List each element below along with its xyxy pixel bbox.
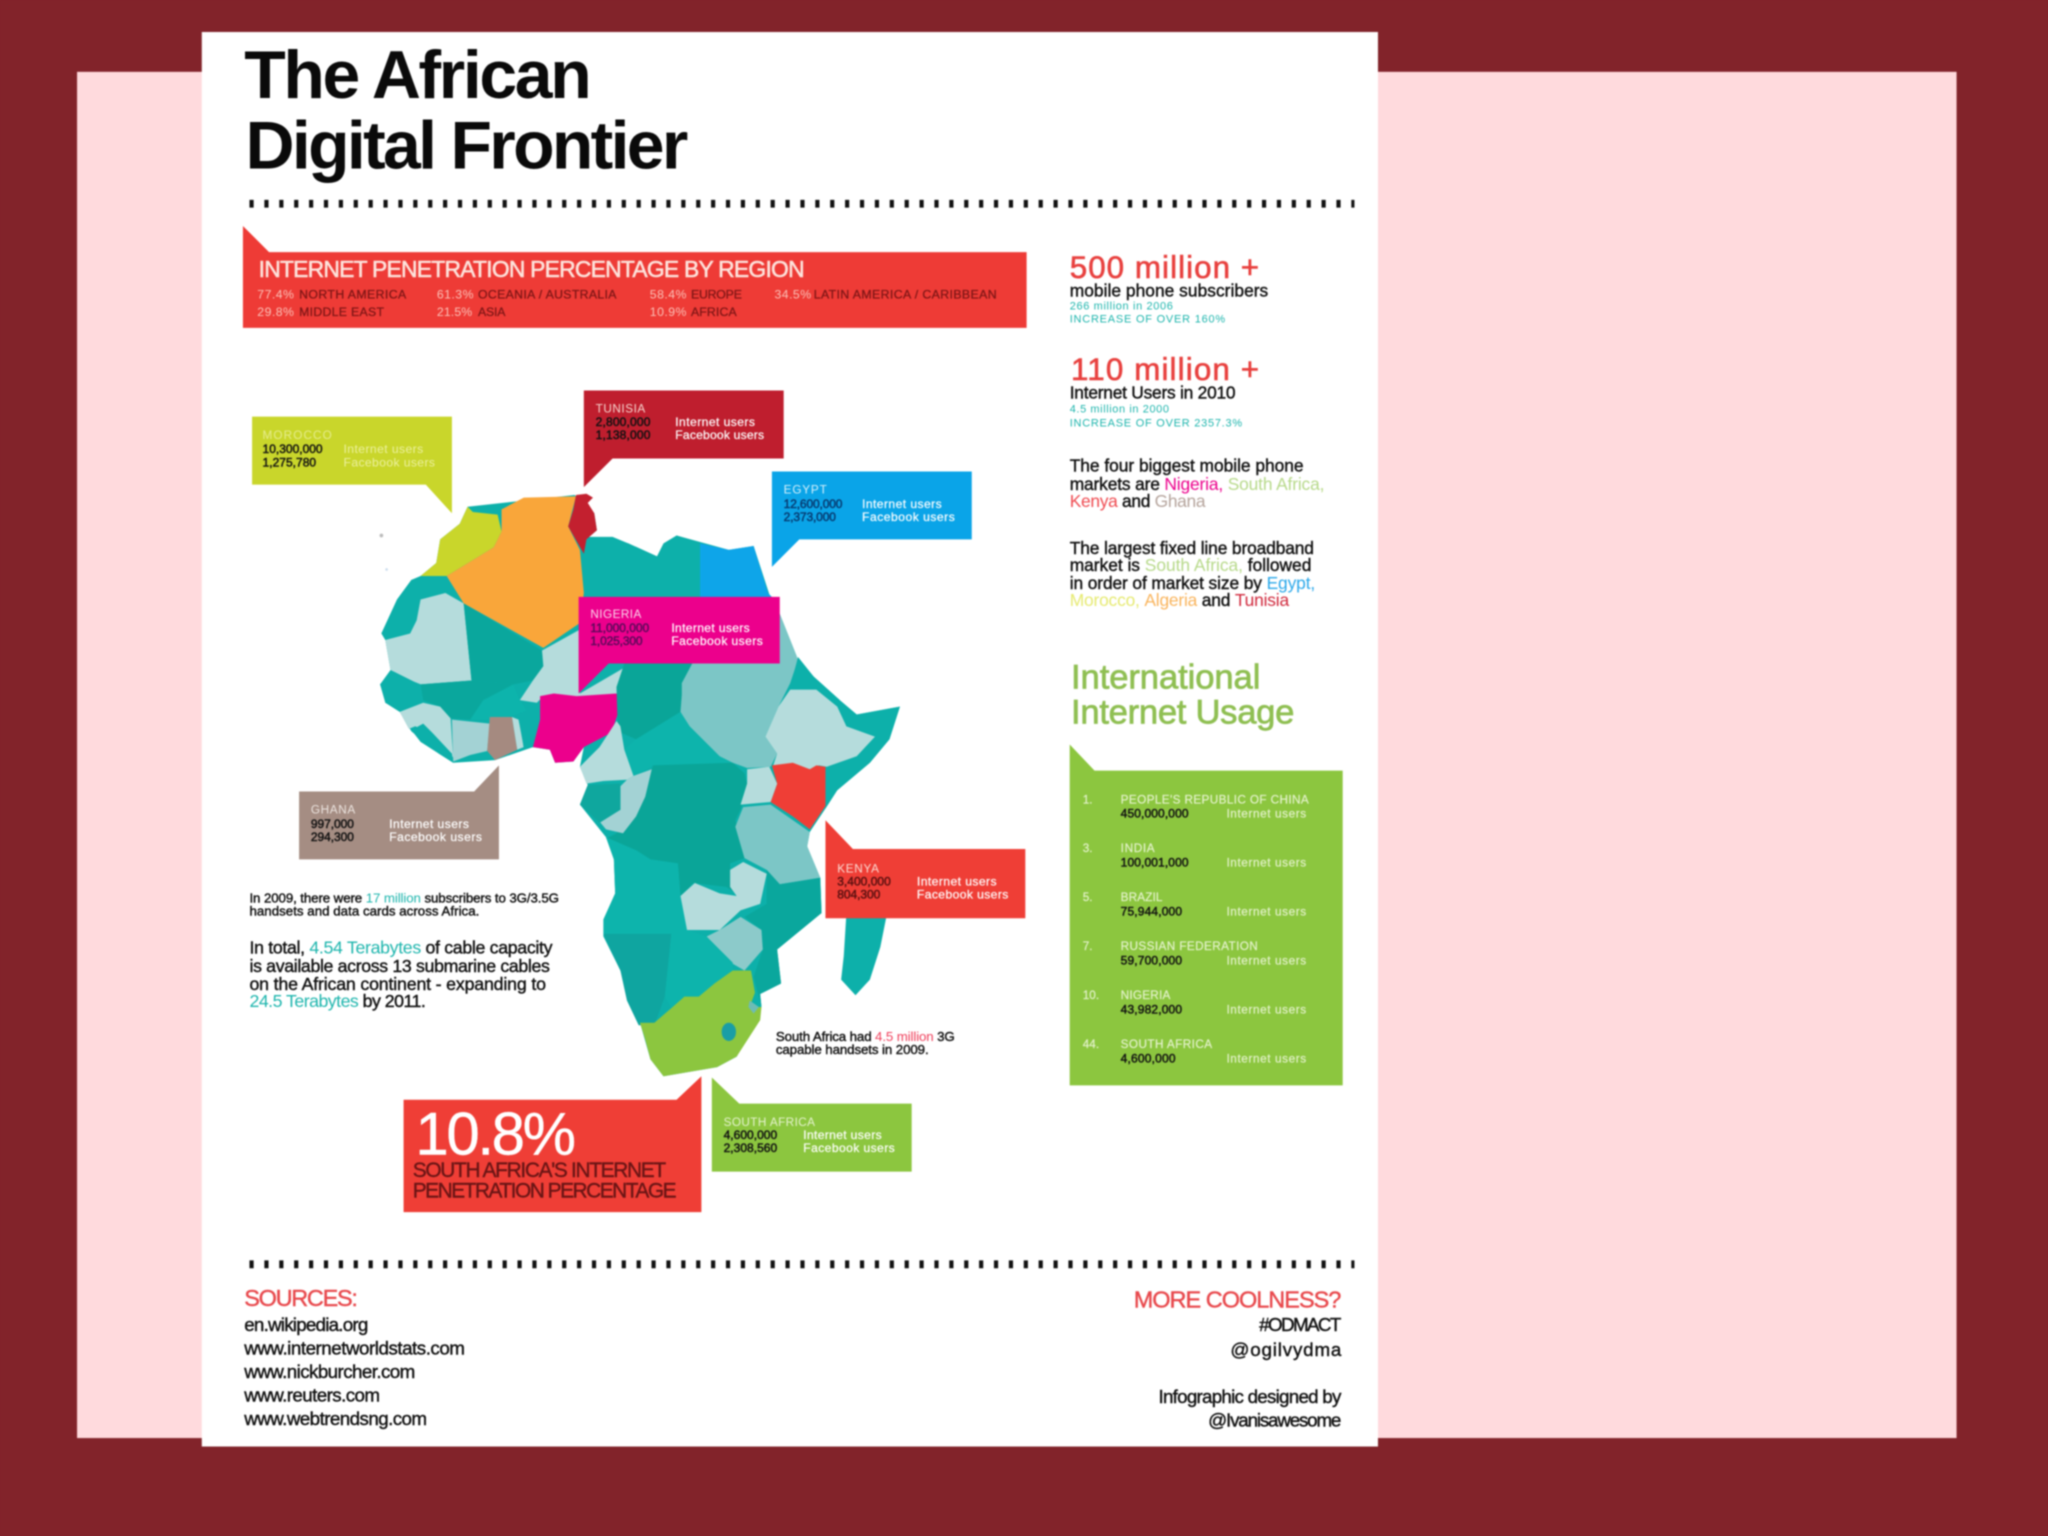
row 4 Russia: Internet users xyxy=(1226,955,1306,968)
region percentages: 29.8% xyxy=(257,305,294,319)
Togo xyxy=(512,717,524,750)
callout: South Africa: Internet users xyxy=(803,1128,882,1142)
region percentages: 58.4% xyxy=(650,287,686,301)
Kenya xyxy=(771,763,825,829)
Western Sahara xyxy=(381,580,445,633)
row 1 China: 450,000,000 xyxy=(1121,807,1189,821)
row 2 India: Internet users xyxy=(1226,857,1306,870)
callout: Kenya: KENYA xyxy=(837,862,879,875)
region percentages: EUROPE xyxy=(691,287,742,301)
Benin xyxy=(519,707,538,748)
callout: Kenya: 804,300 xyxy=(837,888,881,902)
row 2 India: 100,001,000 xyxy=(1121,856,1189,870)
row 2 India: 3. xyxy=(1083,842,1093,855)
text: fixed line broadband markets xyxy=(1070,538,1315,610)
callout: Tunisia xyxy=(584,391,784,487)
row 1 China xyxy=(1083,793,1309,821)
title xyxy=(244,38,688,183)
Ethiopia xyxy=(765,690,875,769)
Chad xyxy=(616,664,692,739)
region percentages: 10.9% xyxy=(650,305,686,319)
region percentages: ASIA xyxy=(478,305,506,319)
stat: 500 million mobile subscribers: 266 million in 2006 xyxy=(1070,301,1173,313)
Somalia xyxy=(825,707,900,808)
row 5 Nigeria: NIGERIA xyxy=(1121,989,1170,1002)
callout: Nigeria: Facebook users xyxy=(671,634,763,648)
text: submarine cable capacity: on the African continent - expanding to xyxy=(249,974,546,994)
text: fixed line broadband markets: Morocco, Algeria and Tunisia xyxy=(1070,590,1289,610)
Angola xyxy=(603,837,707,936)
text: submarine cable capacity: is available across 13 submarine cables xyxy=(249,956,550,976)
region percentages: LATIN AMERICA / CARIBBEAN xyxy=(814,287,997,301)
Sierra Leone and Liberia xyxy=(411,724,453,763)
Tunisia xyxy=(568,494,597,554)
callout: Egypt xyxy=(772,472,972,567)
credits: @Ivanisawesome xyxy=(1208,1409,1341,1430)
text: fixed line broadband markets: in order of market size by Egypt, xyxy=(1070,573,1315,593)
row 1 China: Internet users xyxy=(1226,808,1306,821)
callout: 10.8% South Africa penetration: PENETRATION PERCENTAGE xyxy=(413,1180,677,1203)
callout: Egypt: Facebook users xyxy=(862,510,955,524)
sources list: en.wikipedia.org xyxy=(244,1314,368,1335)
callout: Morocco: Internet users xyxy=(344,442,423,456)
callout: Ghana: 997,000 xyxy=(311,817,354,831)
Uganda xyxy=(741,767,777,805)
row 4 Russia: RUSSIAN FEDERATION xyxy=(1121,940,1258,953)
Guinea xyxy=(400,703,453,758)
text: fixed line broadband markets: market is South Africa, followed xyxy=(1070,555,1311,575)
callout: Kenya: Facebook users xyxy=(917,888,1008,902)
Senegal xyxy=(380,671,423,711)
Ghana xyxy=(487,717,517,760)
Algeria xyxy=(447,496,584,648)
Swaziland xyxy=(748,1000,759,1014)
Egypt xyxy=(700,543,773,598)
callout: Egypt: 2,373,000 xyxy=(784,510,836,524)
Nigeria xyxy=(533,694,622,763)
callout: 10.8% South Africa penetration: SOUTH AFRICA'S INTERNET xyxy=(413,1159,666,1182)
Madagascar xyxy=(841,914,887,995)
Congo xyxy=(600,769,652,833)
heading: International Internet Usage: Internet Usage xyxy=(1071,694,1294,732)
text: biggest mobile phone markets xyxy=(1070,456,1324,511)
panel: white infographic sheet xyxy=(202,32,1378,1447)
region percentages: MIDDLE EAST xyxy=(299,305,384,319)
stat: 110 million internet users: 4.5 million in 2000 xyxy=(1070,404,1169,416)
callout: 10.8% South Africa penetration xyxy=(404,1076,701,1212)
row 5 Nigeria: Internet users xyxy=(1226,1004,1306,1017)
Mauritania xyxy=(385,593,472,684)
sources list: SOURCES: xyxy=(244,1285,358,1311)
credits: #ODMACT xyxy=(1259,1314,1342,1335)
heading: International Internet Usage xyxy=(1071,658,1294,732)
row 1 China: PEOPLE'S REPUBLIC OF CHINA xyxy=(1121,793,1309,806)
panel: international internet usage table xyxy=(1070,744,1343,1085)
callout: Kenya: 3,400,000 xyxy=(837,875,891,889)
callout: Ghana: GHANA xyxy=(311,804,355,817)
callout: Morocco: MOROCCO xyxy=(263,429,332,442)
row 6 South Africa: SOUTH AFRICA xyxy=(1121,1038,1212,1051)
row 3 Brazil: BRAZIL xyxy=(1121,891,1163,904)
sources list: www.nickburcher.com xyxy=(243,1361,415,1382)
callout: South Africa: SOUTH AFRICA xyxy=(724,1116,815,1129)
sources list xyxy=(243,1285,465,1429)
region percentages: NORTH AMERICA xyxy=(299,287,407,301)
callout: Morocco xyxy=(252,417,452,513)
region percentages: 21.5% xyxy=(437,305,472,319)
stat: 110 million internet users: 110 million + xyxy=(1071,352,1259,387)
row 6 South Africa: 44. xyxy=(1083,1038,1099,1051)
Morocco xyxy=(421,507,502,576)
Ivory Coast xyxy=(452,720,490,761)
text: South Africa 3G handsets: South Africa had 4.5 million 3G xyxy=(776,1029,955,1044)
callout: Tunisia: Internet users xyxy=(675,415,755,429)
callout: South Africa: 2,308,560 xyxy=(724,1141,777,1155)
text: fixed line broadband markets: The largest fixed line broadband xyxy=(1070,538,1314,558)
stat: 110 million internet users xyxy=(1070,352,1259,429)
region percentages: 77.4% xyxy=(257,287,294,301)
region percentages: 34.5% xyxy=(775,287,811,301)
text: 3G subscribers: handsets and data cards across Africa. xyxy=(249,904,479,919)
callout: Nigeria: 11,000,000 xyxy=(590,621,649,635)
row 3 Brazil: 5. xyxy=(1083,891,1093,904)
map of Africa xyxy=(380,494,900,1076)
heading: International Internet Usage: International xyxy=(1071,658,1260,696)
row 3 Brazil: Internet users xyxy=(1226,906,1306,919)
callout: Morocco: Facebook users xyxy=(344,455,435,469)
sources list: www.internetworldstats.com xyxy=(243,1337,465,1358)
stat: 110 million internet users: INCREASE OF OVER 2357.3% xyxy=(1070,417,1242,429)
callout: Morocco: 10,300,000 xyxy=(263,442,323,456)
sources list: www.reuters.com xyxy=(243,1384,380,1405)
Mali xyxy=(464,603,543,684)
region percentages: AFRICA xyxy=(691,305,737,319)
banner heading: INTERNET PENETRATION PERCENTAGE BY REGION xyxy=(259,256,805,282)
stat: 500 million mobile subscribers xyxy=(1070,250,1269,326)
row 4 Russia: 7. xyxy=(1083,940,1093,953)
row 4 Russia xyxy=(1083,940,1306,968)
row 6 South Africa xyxy=(1083,1038,1306,1066)
row 4 Russia: 59,700,000 xyxy=(1121,954,1182,968)
callout: Ghana: Internet users xyxy=(389,817,469,831)
row 5 Nigeria: 10. xyxy=(1083,989,1099,1002)
Cameroon xyxy=(580,721,633,784)
Zambia xyxy=(680,862,767,930)
callout: Kenya: Internet users xyxy=(917,875,997,889)
text: submarine cable capacity: 24.5 Terabytes by 2011. xyxy=(249,991,426,1011)
row 1 China: 1. xyxy=(1083,793,1093,806)
title: The African xyxy=(244,38,592,113)
text: biggest mobile phone markets: Kenya and Ghana xyxy=(1070,491,1206,511)
row 6 South Africa: 4,600,000 xyxy=(1121,1052,1176,1066)
callout: Ghana: Facebook users xyxy=(389,830,482,844)
callout: Egypt: 12,600,000 xyxy=(784,497,843,511)
panel: internet penetration by region banner xyxy=(243,226,1027,328)
text: biggest mobile phone markets: markets are Nigeria, South Africa, xyxy=(1070,474,1324,494)
text: submarine cable capacity: In total, 4.54 Terabytes of cable capacity xyxy=(249,937,553,957)
stat: 110 million internet users: Internet Users in 2010 xyxy=(1070,382,1236,402)
row 6 South Africa: Internet users xyxy=(1226,1053,1306,1066)
stat: 500 million mobile subscribers: 500 million + xyxy=(1070,250,1259,285)
row 5 Nigeria xyxy=(1083,989,1306,1017)
callout: Tunisia: TUNISIA xyxy=(596,403,645,416)
sources list: www.webtrendsng.com xyxy=(243,1408,427,1429)
row 3 Brazil: 75,944,000 xyxy=(1121,905,1182,919)
text: South Africa 3G handsets xyxy=(776,1029,955,1057)
callout: Ghana: 294,300 xyxy=(311,830,354,844)
Mozambique xyxy=(744,870,822,1007)
credits: MORE COOLNESS? xyxy=(1134,1286,1341,1312)
title: Digital Frontier xyxy=(246,108,688,183)
callout: Kenya xyxy=(825,820,1025,918)
callout: Ghana xyxy=(299,765,499,859)
Sudan xyxy=(680,614,798,768)
callout: Nigeria xyxy=(579,597,780,694)
callout: Egypt: EGYPT xyxy=(784,484,827,497)
stat: 500 million mobile subscribers: INCREASE OF OVER 160% xyxy=(1070,314,1225,326)
callout: Tunisia: 1,138,000 xyxy=(596,428,651,442)
row 2 India xyxy=(1083,842,1306,870)
Lesotho xyxy=(722,1023,736,1041)
row 2 India: INDIA xyxy=(1121,842,1155,855)
region percentages: OCEANIA / AUSTRALIA xyxy=(478,287,617,301)
region percentages xyxy=(257,287,997,319)
Burkina Faso xyxy=(470,684,526,720)
credits: @ogilvydma xyxy=(1230,1339,1342,1360)
Central African Republic xyxy=(624,712,733,776)
Gabon xyxy=(580,784,620,823)
callout: Tunisia: Facebook users xyxy=(675,428,764,442)
region percentages: 61.3% xyxy=(437,287,474,301)
callout: Egypt: Internet users xyxy=(862,497,942,511)
Zimbabwe xyxy=(707,917,763,970)
credits xyxy=(1134,1286,1342,1430)
callout: South Africa xyxy=(712,1078,912,1172)
text: 3G subscribers: In 2009, there were 17 million subscribers to 3G/3.5G xyxy=(249,891,559,906)
callout: Nigeria: NIGERIA xyxy=(590,608,641,621)
callout: 10.8% South Africa penetration: 10.8% xyxy=(415,1101,576,1168)
text: South Africa 3G handsets: capable handsets in 2009. xyxy=(776,1042,929,1057)
stat: 500 million mobile subscribers: mobile phone subscribers xyxy=(1070,280,1269,300)
text: submarine cable capacity xyxy=(249,937,553,1011)
callout: South Africa: Facebook users xyxy=(803,1141,895,1155)
text: biggest mobile phone markets: The four biggest mobile phone xyxy=(1070,456,1304,476)
Botswana xyxy=(665,934,733,1010)
Namibia xyxy=(603,934,671,1025)
row 3 Brazil xyxy=(1083,891,1306,919)
callout: South Africa: 4,600,000 xyxy=(724,1128,777,1142)
callout: Morocco: 1,275,780 xyxy=(263,455,316,469)
Libya xyxy=(584,536,700,598)
DR Congo xyxy=(606,763,747,896)
Tanzania xyxy=(735,805,820,884)
row 5 Nigeria: 43,982,000 xyxy=(1121,1003,1182,1017)
credits: Infographic designed by xyxy=(1159,1386,1342,1407)
callout: Nigeria: 1,025,300 xyxy=(590,634,643,648)
callout: Tunisia: 2,800,000 xyxy=(596,415,651,429)
text: 3G subscribers xyxy=(249,891,559,919)
Niger xyxy=(520,630,627,703)
Eritrea xyxy=(790,657,840,701)
callout: Nigeria: Internet users xyxy=(671,621,750,635)
South Africa xyxy=(640,970,761,1076)
